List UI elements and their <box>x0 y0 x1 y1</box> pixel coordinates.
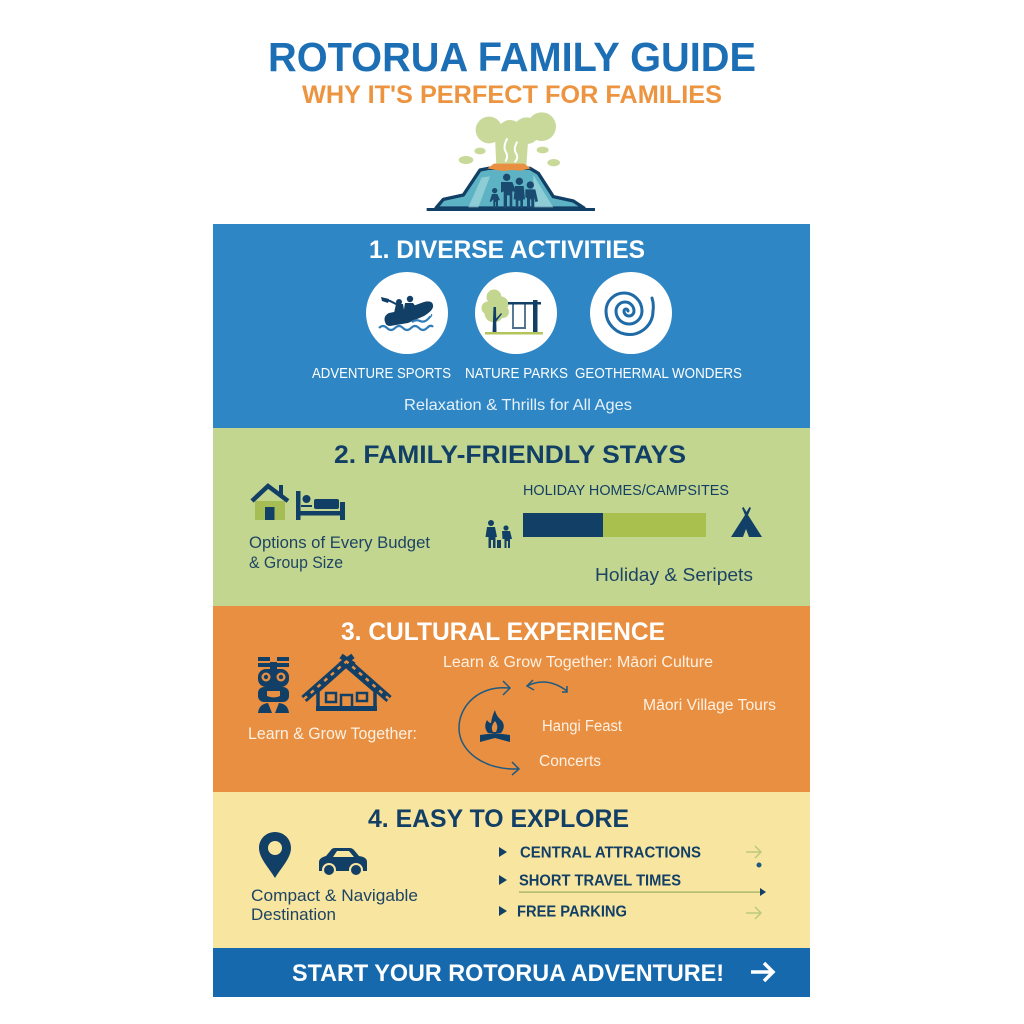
panel: family-friendly stays <box>213 428 810 606</box>
label: adventure sports: ADVENTURE SPORTS <box>312 366 451 382</box>
text: concerts: Concerts <box>539 753 601 770</box>
icon: tiki carving <box>258 657 289 713</box>
text: learn and grow together: Learn & Grow Together: <box>248 725 417 743</box>
marker dot <box>756 862 762 868</box>
label: geothermal wonders: GEOTHERMAL WONDERS <box>575 366 742 382</box>
list item: central attractions: CENTRAL ATTRACTIONS <box>520 844 701 862</box>
list item: free parking: FREE PARKING <box>517 904 627 920</box>
heading: diverse activities: 1. DIVERSE ACTIVITIES <box>369 236 645 264</box>
text: maori village tours: Māori Village Tours <box>643 697 776 714</box>
arrow: cycle left <box>459 681 519 775</box>
text: learn and grow maori culture: Learn & Grow Together: Māori Culture <box>443 654 713 671</box>
icon: house <box>252 485 288 520</box>
text: options of every budget: Options of Every Budget <box>249 533 430 552</box>
label: holiday homes/campsites: HOLIDAY HOMES/CAMPSITES <box>523 483 729 499</box>
text: start your rotorua adventure: START YOUR ROTORUA ADVENTURE! <box>292 960 724 987</box>
icon: campfire <box>480 710 510 742</box>
label: nature parks: NATURE PARKS <box>465 366 568 382</box>
text: compact and navigable destination: Destination <box>251 905 336 924</box>
call to action banner <box>213 948 810 997</box>
icon: map pin <box>259 832 291 878</box>
icon: family <box>486 520 512 548</box>
icon: volcano with family <box>427 112 595 211</box>
list item: short travel times: SHORT TRAVEL TIMES <box>519 872 681 890</box>
text: compact and navigable destination <box>251 886 418 924</box>
heading: easy to explore: 4. EASY TO EXPLORE <box>368 805 629 833</box>
arrow: short travel times <box>519 888 766 896</box>
icon: car <box>319 848 367 877</box>
icon: maori meeting house <box>304 656 389 711</box>
text: holiday and seripets: Holiday & Seripets <box>595 565 753 585</box>
arrow: central attractions <box>746 846 761 858</box>
icon: bed <box>296 491 345 520</box>
panel: easy to explore <box>213 792 810 948</box>
subtitle: WHY IT'S PERFECT FOR FAMILIES <box>302 81 722 109</box>
text: options of every budget: & Group Size <box>249 553 343 572</box>
text: options of every budget <box>249 533 430 572</box>
caption: relaxation and thrills: Relaxation & Thrills for All Ages <box>404 397 632 414</box>
arrow: cycle top <box>527 680 567 692</box>
icon: tree and swing <box>475 272 557 354</box>
heading: family-friendly stays: 2. FAMILY-FRIENDLY STAYS <box>334 441 686 469</box>
arrow: call to action <box>751 963 773 981</box>
icon: tent <box>731 507 762 537</box>
title: ROTORUA FAMILY GUIDE <box>268 34 756 80</box>
arrow: free parking <box>746 907 761 919</box>
icon: geothermal spiral <box>590 272 672 354</box>
panel: diverse activities <box>213 224 810 428</box>
text: hangi feast: Hangi Feast <box>542 718 623 735</box>
panel: cultural experience <box>213 606 810 792</box>
text: compact and navigable destination: Compact & Navigable <box>251 886 418 905</box>
heading: cultural experience: 3. CULTURAL EXPERIENCE <box>341 618 665 646</box>
icon: kayak <box>366 272 448 354</box>
bar chart: holiday homes vs campsites <box>523 513 706 537</box>
